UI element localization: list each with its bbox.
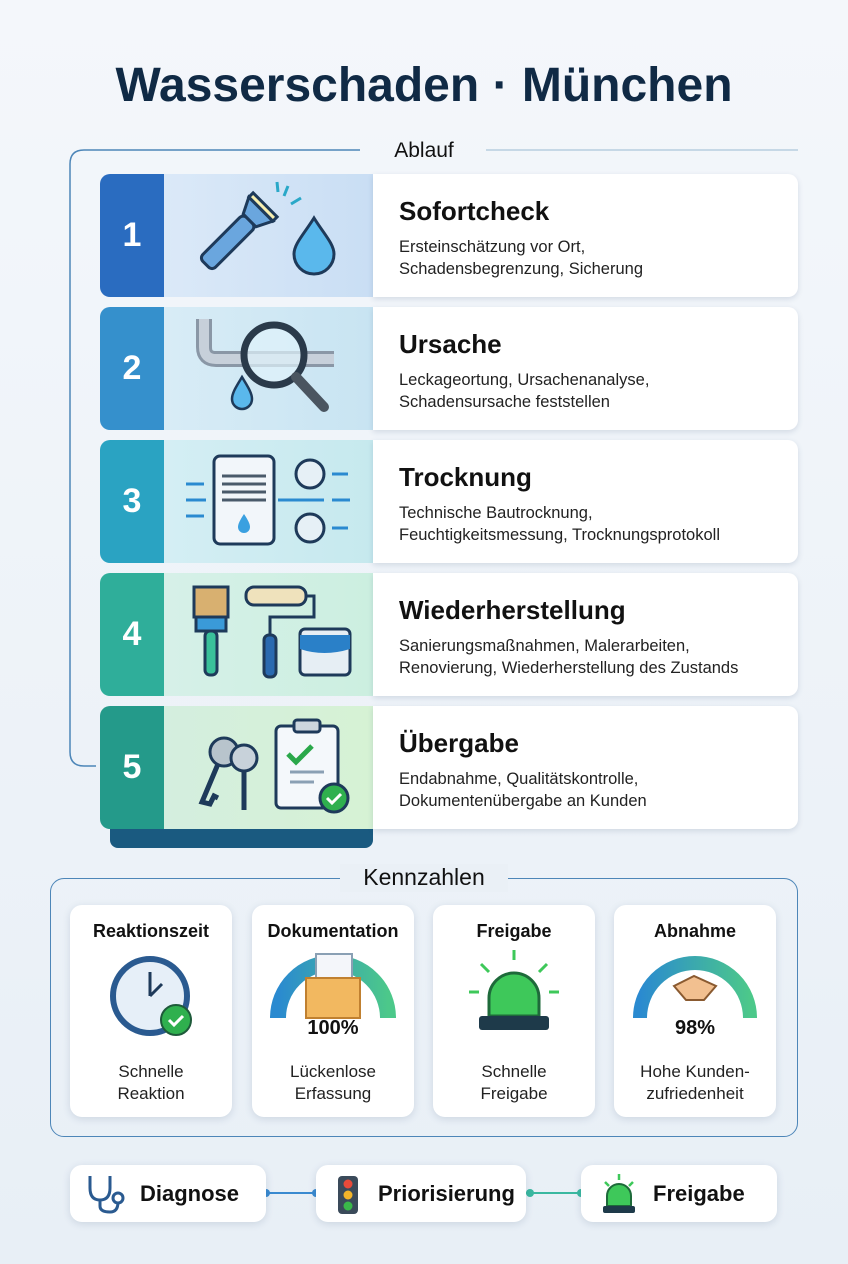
step 1: Schadensbegrenzung, Sicherung (399, 260, 643, 278)
step 3: Trocknung (399, 462, 532, 492)
step 3: Technische Bautrocknung, (399, 504, 593, 522)
title: Wasserschaden · München (115, 59, 733, 112)
step 1: 1 (123, 216, 141, 254)
step 4: Wiederherstellung (399, 595, 626, 625)
step 1 (100, 174, 800, 301)
step 3 (100, 440, 800, 567)
pill: Diagnose (70, 1165, 266, 1222)
step 2: Schadensursache feststellen (399, 393, 610, 411)
step 4: 4 (123, 615, 141, 653)
icon: dehumidifier and fans (164, 440, 374, 563)
card: Dokumentation (252, 905, 414, 1117)
card: Dokumentation: Dokumentation (267, 921, 398, 941)
card: Freigabe: Schnelle (481, 1062, 547, 1081)
step 1: Sofortcheck (399, 196, 549, 226)
card: Abnahme: Abnahme (654, 921, 736, 941)
pill: Diagnose: Diagnose (140, 1180, 239, 1206)
card: Abnahme: zufriedenheit (646, 1084, 744, 1103)
card: Freigabe (433, 905, 595, 1117)
step 4 (100, 573, 800, 700)
bottom dark bar (110, 826, 373, 848)
step 2: Leckageortung, Ursachenanalyse, (399, 371, 649, 389)
icon: pipe and magnifier (164, 307, 374, 430)
step 5: Endabnahme, Qualitätskontrolle, (399, 770, 638, 788)
connectors (266, 1189, 581, 1197)
step 5: Übergabe (399, 728, 519, 758)
card: Reaktionszeit: Reaktionszeit (93, 921, 209, 941)
panel: Kennzahlen frame (50, 878, 798, 1137)
heading: Ablauf: Ablauf (394, 139, 454, 162)
card: Abnahme (614, 905, 776, 1117)
pill: Freigabe: Freigabe (653, 1180, 745, 1206)
pill: Priorisierung (316, 1165, 526, 1222)
card: Reaktionszeit: Schnelle (118, 1062, 184, 1081)
heading: Kennzahlen: Kennzahlen (363, 864, 485, 890)
step 2 (100, 307, 800, 434)
card: Dokumentation: Erfassung (295, 1084, 371, 1103)
step 4: Sanierungsmaßnahmen, Malerarbeiten, (399, 637, 690, 655)
step 2: Ursache (399, 329, 502, 359)
card: Freigabe: Freigabe (476, 921, 552, 941)
ablauf frame (69, 149, 798, 767)
card: Dokumentation: 100% (307, 1017, 359, 1039)
icon: brush, roller, paint can (164, 573, 374, 696)
step 4: Renovierung, Wiederherstellung des Zustands (399, 659, 738, 677)
icon: keys and clipboard (164, 706, 374, 829)
card: Dokumentation: Lückenlose (290, 1062, 376, 1081)
step 3: Feuchtigkeitsmessung, Trocknungsprotokoll (399, 526, 720, 544)
step 1: Ersteinschätzung vor Ort, (399, 238, 585, 256)
step 3: 3 (123, 482, 141, 520)
heading: Kennzahlen (340, 864, 508, 892)
pill: Priorisierung: Priorisierung (378, 1180, 515, 1206)
card: Reaktionszeit: Reaktion (117, 1084, 185, 1103)
step 2: 2 (123, 349, 141, 387)
pill: Freigabe (581, 1165, 777, 1222)
card: Abnahme: 98% (675, 1017, 715, 1039)
card: Reaktionszeit (70, 905, 232, 1117)
step 5: 5 (123, 748, 141, 786)
card: Abnahme: Hohe Kunden- (640, 1062, 750, 1081)
step 5 (100, 706, 800, 833)
icon: flashlight and drop (164, 174, 374, 297)
step 5: Dokumentenübergabe an Kunden (399, 792, 647, 810)
card: Freigabe: Freigabe (480, 1084, 548, 1103)
